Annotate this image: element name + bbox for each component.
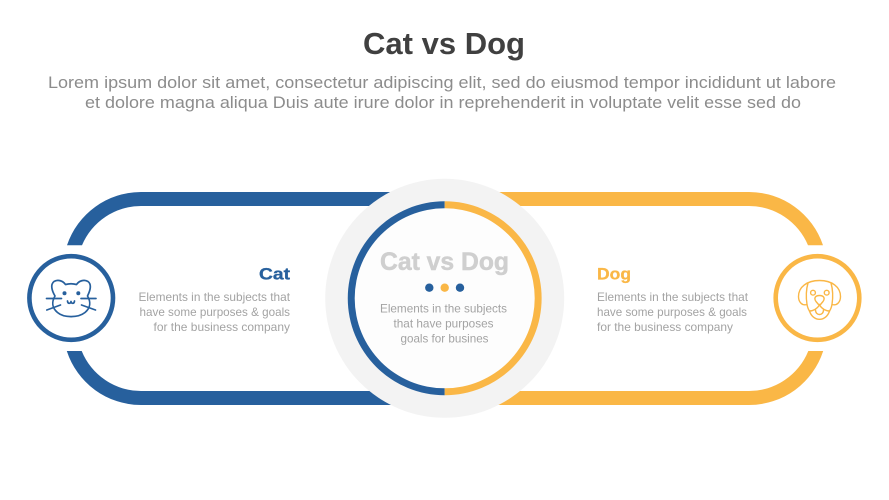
- yellow track: dog side: [445, 192, 823, 405]
- center description: goals for busines: [400, 332, 488, 346]
- icon: dog: [798, 280, 840, 319]
- blue track: cat side: [67, 192, 445, 405]
- cat description: Elements in the subjects that: [138, 290, 291, 304]
- center description: that have purposes: [394, 316, 494, 330]
- center ring: blue half: [348, 201, 445, 395]
- center inner circle: [351, 204, 539, 392]
- dog badge circle: [776, 256, 859, 340]
- center heading: Cat vs Dog: [380, 248, 509, 276]
- subtitle text: [48, 74, 836, 112]
- dog description: for the business company: [597, 320, 733, 334]
- center ring: yellow half: [445, 201, 542, 395]
- title: Cat vs Dog: [363, 26, 525, 61]
- icon: cat: [46, 280, 96, 317]
- cat badge circle: [29, 256, 113, 340]
- center dots: [425, 284, 464, 292]
- center description: Elements in the subjects: [380, 302, 507, 316]
- dog description: [597, 290, 749, 334]
- cat description: have some purposes & goals: [140, 305, 290, 319]
- dog description: have some purposes & goals: [597, 305, 747, 319]
- subtitle text: Lorem ipsum dolor sit amet, consectetur adipiscing elit, sed do eiusmod tempor incididunt ut labore: [48, 74, 836, 92]
- center description: [380, 302, 507, 346]
- subtitle text: et dolore magna aliqua Duis aute irure dolor in reprehenderit in voluptate velit esse sed do: [85, 94, 801, 112]
- cat description: [138, 290, 291, 334]
- dog description: Elements in the subjects that: [597, 290, 749, 304]
- cat heading: Cat: [259, 264, 290, 284]
- center gray circle: [325, 179, 564, 418]
- cat description: for the business company: [154, 320, 290, 334]
- dog heading: Dog: [597, 264, 631, 284]
